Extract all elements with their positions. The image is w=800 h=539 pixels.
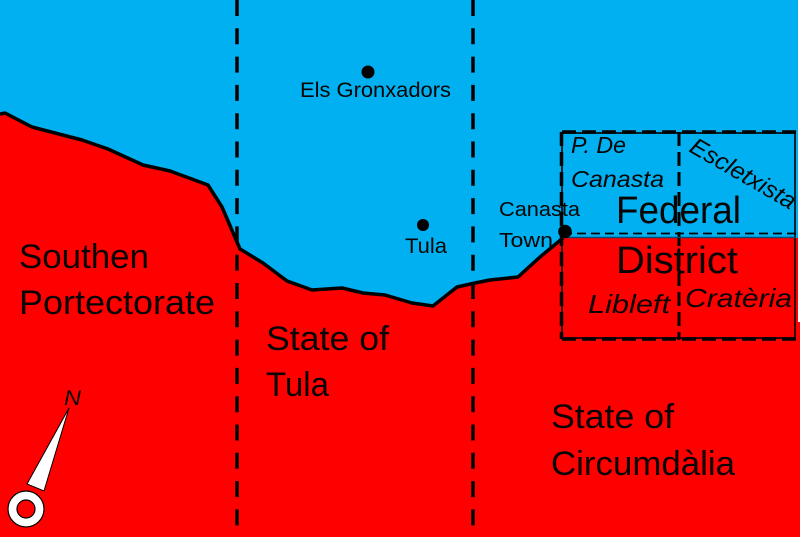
icon: north compass (8, 387, 82, 527)
city marker: Canasta Town (558, 225, 572, 238)
label: State of Circumdàlia: State of (551, 398, 675, 436)
city marker: Els Gronxadors (362, 66, 374, 78)
federal district boundary (562, 132, 796, 340)
label: Federal District (616, 190, 741, 282)
label: Canasta Town: Canasta (499, 199, 581, 221)
compass letter N: N (64, 387, 82, 410)
label: State of Circumdàlia (551, 398, 735, 483)
label: State of Tula: Tula (266, 366, 329, 404)
label: Els Gronxadors: Els Gronxadors (300, 79, 451, 102)
label: State of Tula: State of (266, 320, 390, 358)
label: Escletxista: Escletxista (685, 133, 800, 215)
border: State of Tula / State of Circumdàlia (471, 0, 475, 526)
label: Southern Portectorate: Southen (19, 238, 149, 276)
city marker: Tula (417, 219, 429, 231)
label: Cratèria: Cratèria (685, 283, 792, 313)
label: Canasta Town (499, 199, 581, 252)
sea background (0, 0, 798, 322)
label: Federal District: Federal (616, 190, 741, 232)
label: P. De Canasta: P. De (571, 132, 626, 158)
compass ring (8, 491, 44, 527)
label: Federal District: District (616, 240, 738, 282)
label: Libleft: Libleft (588, 289, 672, 319)
label: P. De Canasta: Canasta (571, 166, 664, 192)
border: Southern Protectorate / State of Tula (235, 0, 239, 526)
label: Southern Portectorate: Portectorate (19, 284, 215, 322)
compass needle (27, 408, 69, 491)
label: State of Circumdàlia: Circumdàlia (551, 445, 735, 483)
label: State of Tula (266, 320, 390, 404)
label: Tula: Tula (405, 235, 447, 258)
land: red territory (0, 113, 800, 537)
label: Southern Portectorate (19, 238, 215, 322)
coastline (0, 113, 563, 306)
compass ring hole (17, 500, 35, 518)
label: Canasta Town: Town (499, 230, 553, 252)
label: P. De Canasta (571, 132, 664, 192)
